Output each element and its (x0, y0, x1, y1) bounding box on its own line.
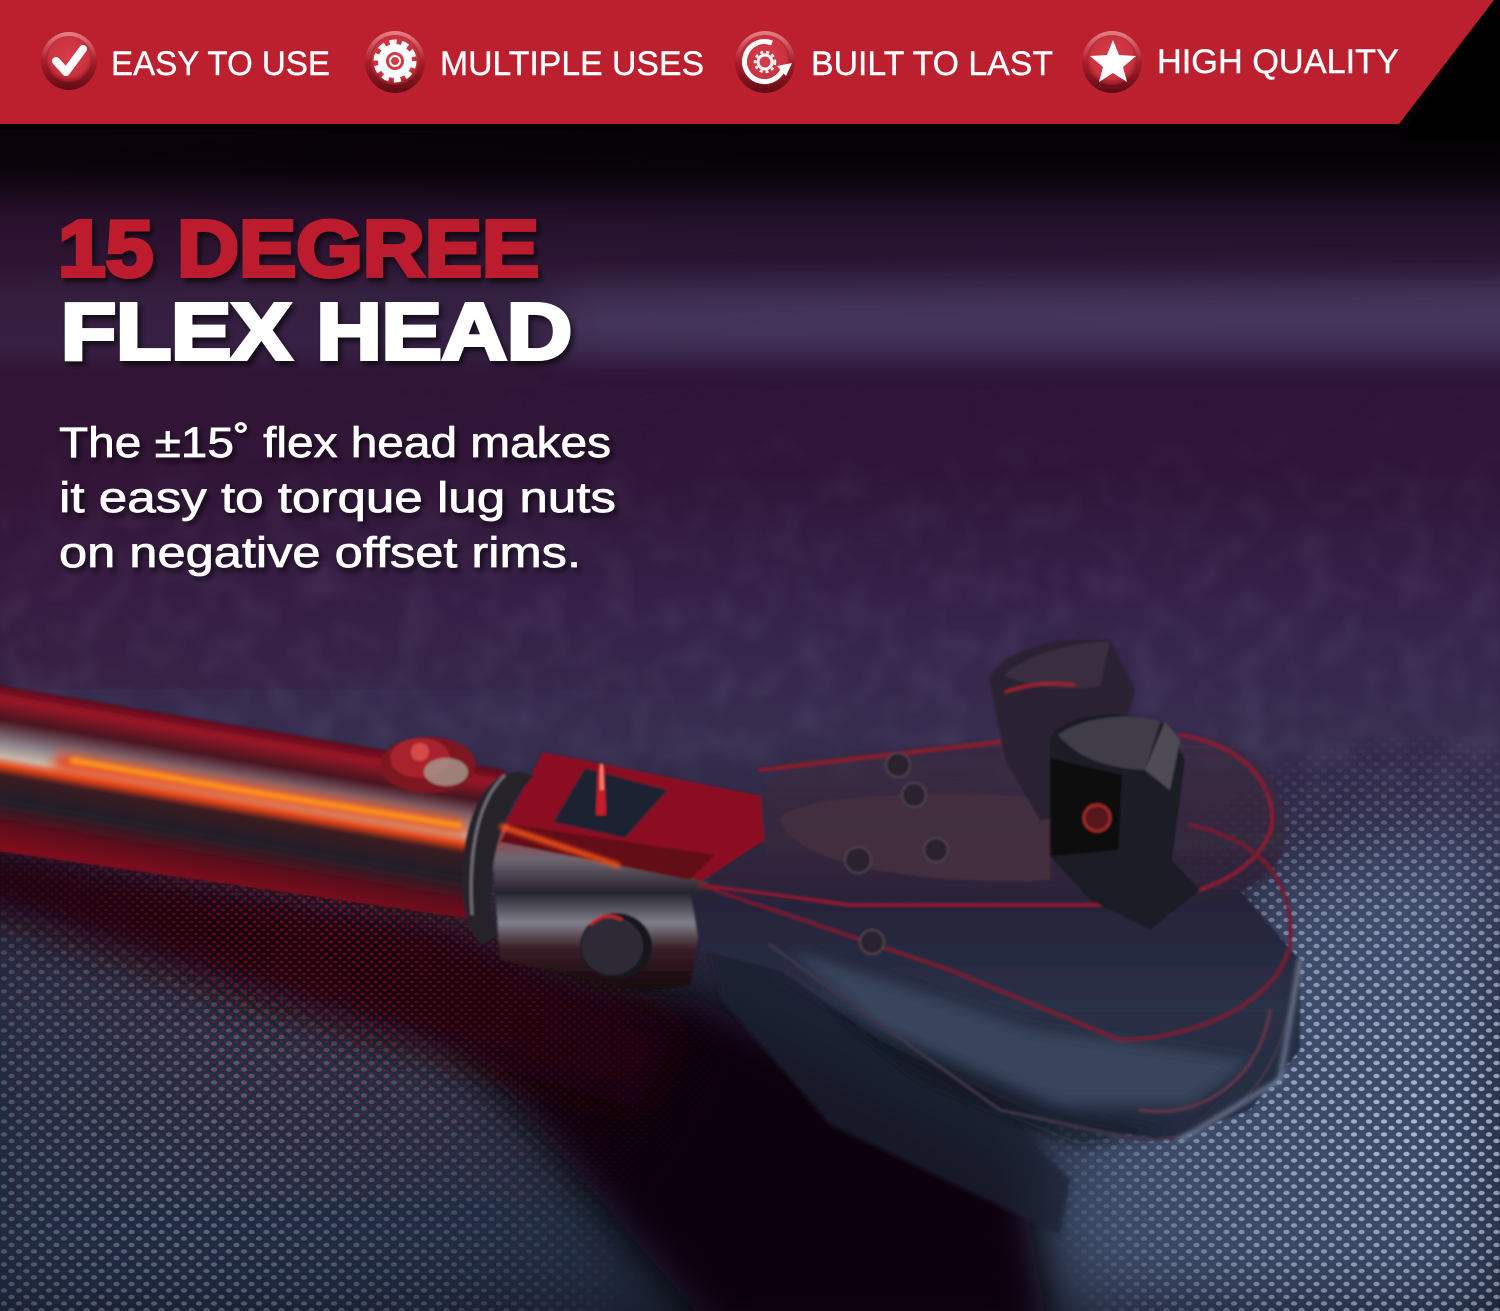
feature: easy to use (41, 32, 330, 90)
collar ring (462, 772, 535, 945)
wrench handle shaft (0, 684, 505, 920)
lit fabric left (0, 930, 700, 1311)
top banner background (0, 0, 1494, 124)
ghosted flex head top plate (700, 732, 1285, 905)
feature: multiple uses (365, 31, 704, 93)
icon: check mark (41, 32, 97, 90)
front square drive (1050, 714, 1200, 930)
bolt on shaft (380, 737, 476, 793)
icon: gear with circular arrow (735, 31, 795, 93)
drive pin (1084, 805, 1110, 831)
feature: easy to use: EASY TO USE (111, 45, 330, 83)
red neck block (505, 752, 765, 882)
ratchet head lower body (690, 890, 1300, 1140)
lit fabric right (1030, 820, 1500, 1311)
description text: it easy to torque lug nuts (59, 474, 616, 522)
description text (59, 419, 616, 577)
description text: on negative offset rims. (59, 529, 581, 577)
orange reflection on neck (500, 826, 620, 866)
icon: star (1082, 31, 1142, 93)
tool shadow on fabric (400, 970, 1050, 1311)
rear square drive, ghost position (990, 639, 1135, 820)
silver tube section (490, 822, 712, 990)
heading: 15 degree flex head: FLEX HEAD (61, 287, 572, 376)
wrench: torque wrench handle and flex head (0, 639, 1300, 1235)
faint ghost tail below head (700, 900, 1070, 1235)
description text: The ±15˚ flex head makes (59, 419, 611, 467)
heading: 15 degree flex head: 15 DEGREE (58, 204, 539, 293)
ghosted head outline strokes (700, 735, 1300, 1140)
heading: 15 degree flex head (58, 204, 572, 376)
feature: high quality: HIGH QUALITY (1157, 43, 1399, 81)
feature: high quality (1082, 31, 1399, 93)
round push button (580, 913, 652, 979)
icon: gear (365, 31, 425, 93)
feature: multiple uses: MULTIPLE USES (440, 45, 704, 83)
head screws (845, 753, 948, 954)
feature: built to last (735, 31, 1053, 93)
feature: built to last: BUILT TO LAST (811, 45, 1053, 83)
black corner behind banner (1399, 0, 1500, 140)
square window on neck (553, 764, 668, 838)
red-orange highlight on shaft (50, 754, 465, 834)
